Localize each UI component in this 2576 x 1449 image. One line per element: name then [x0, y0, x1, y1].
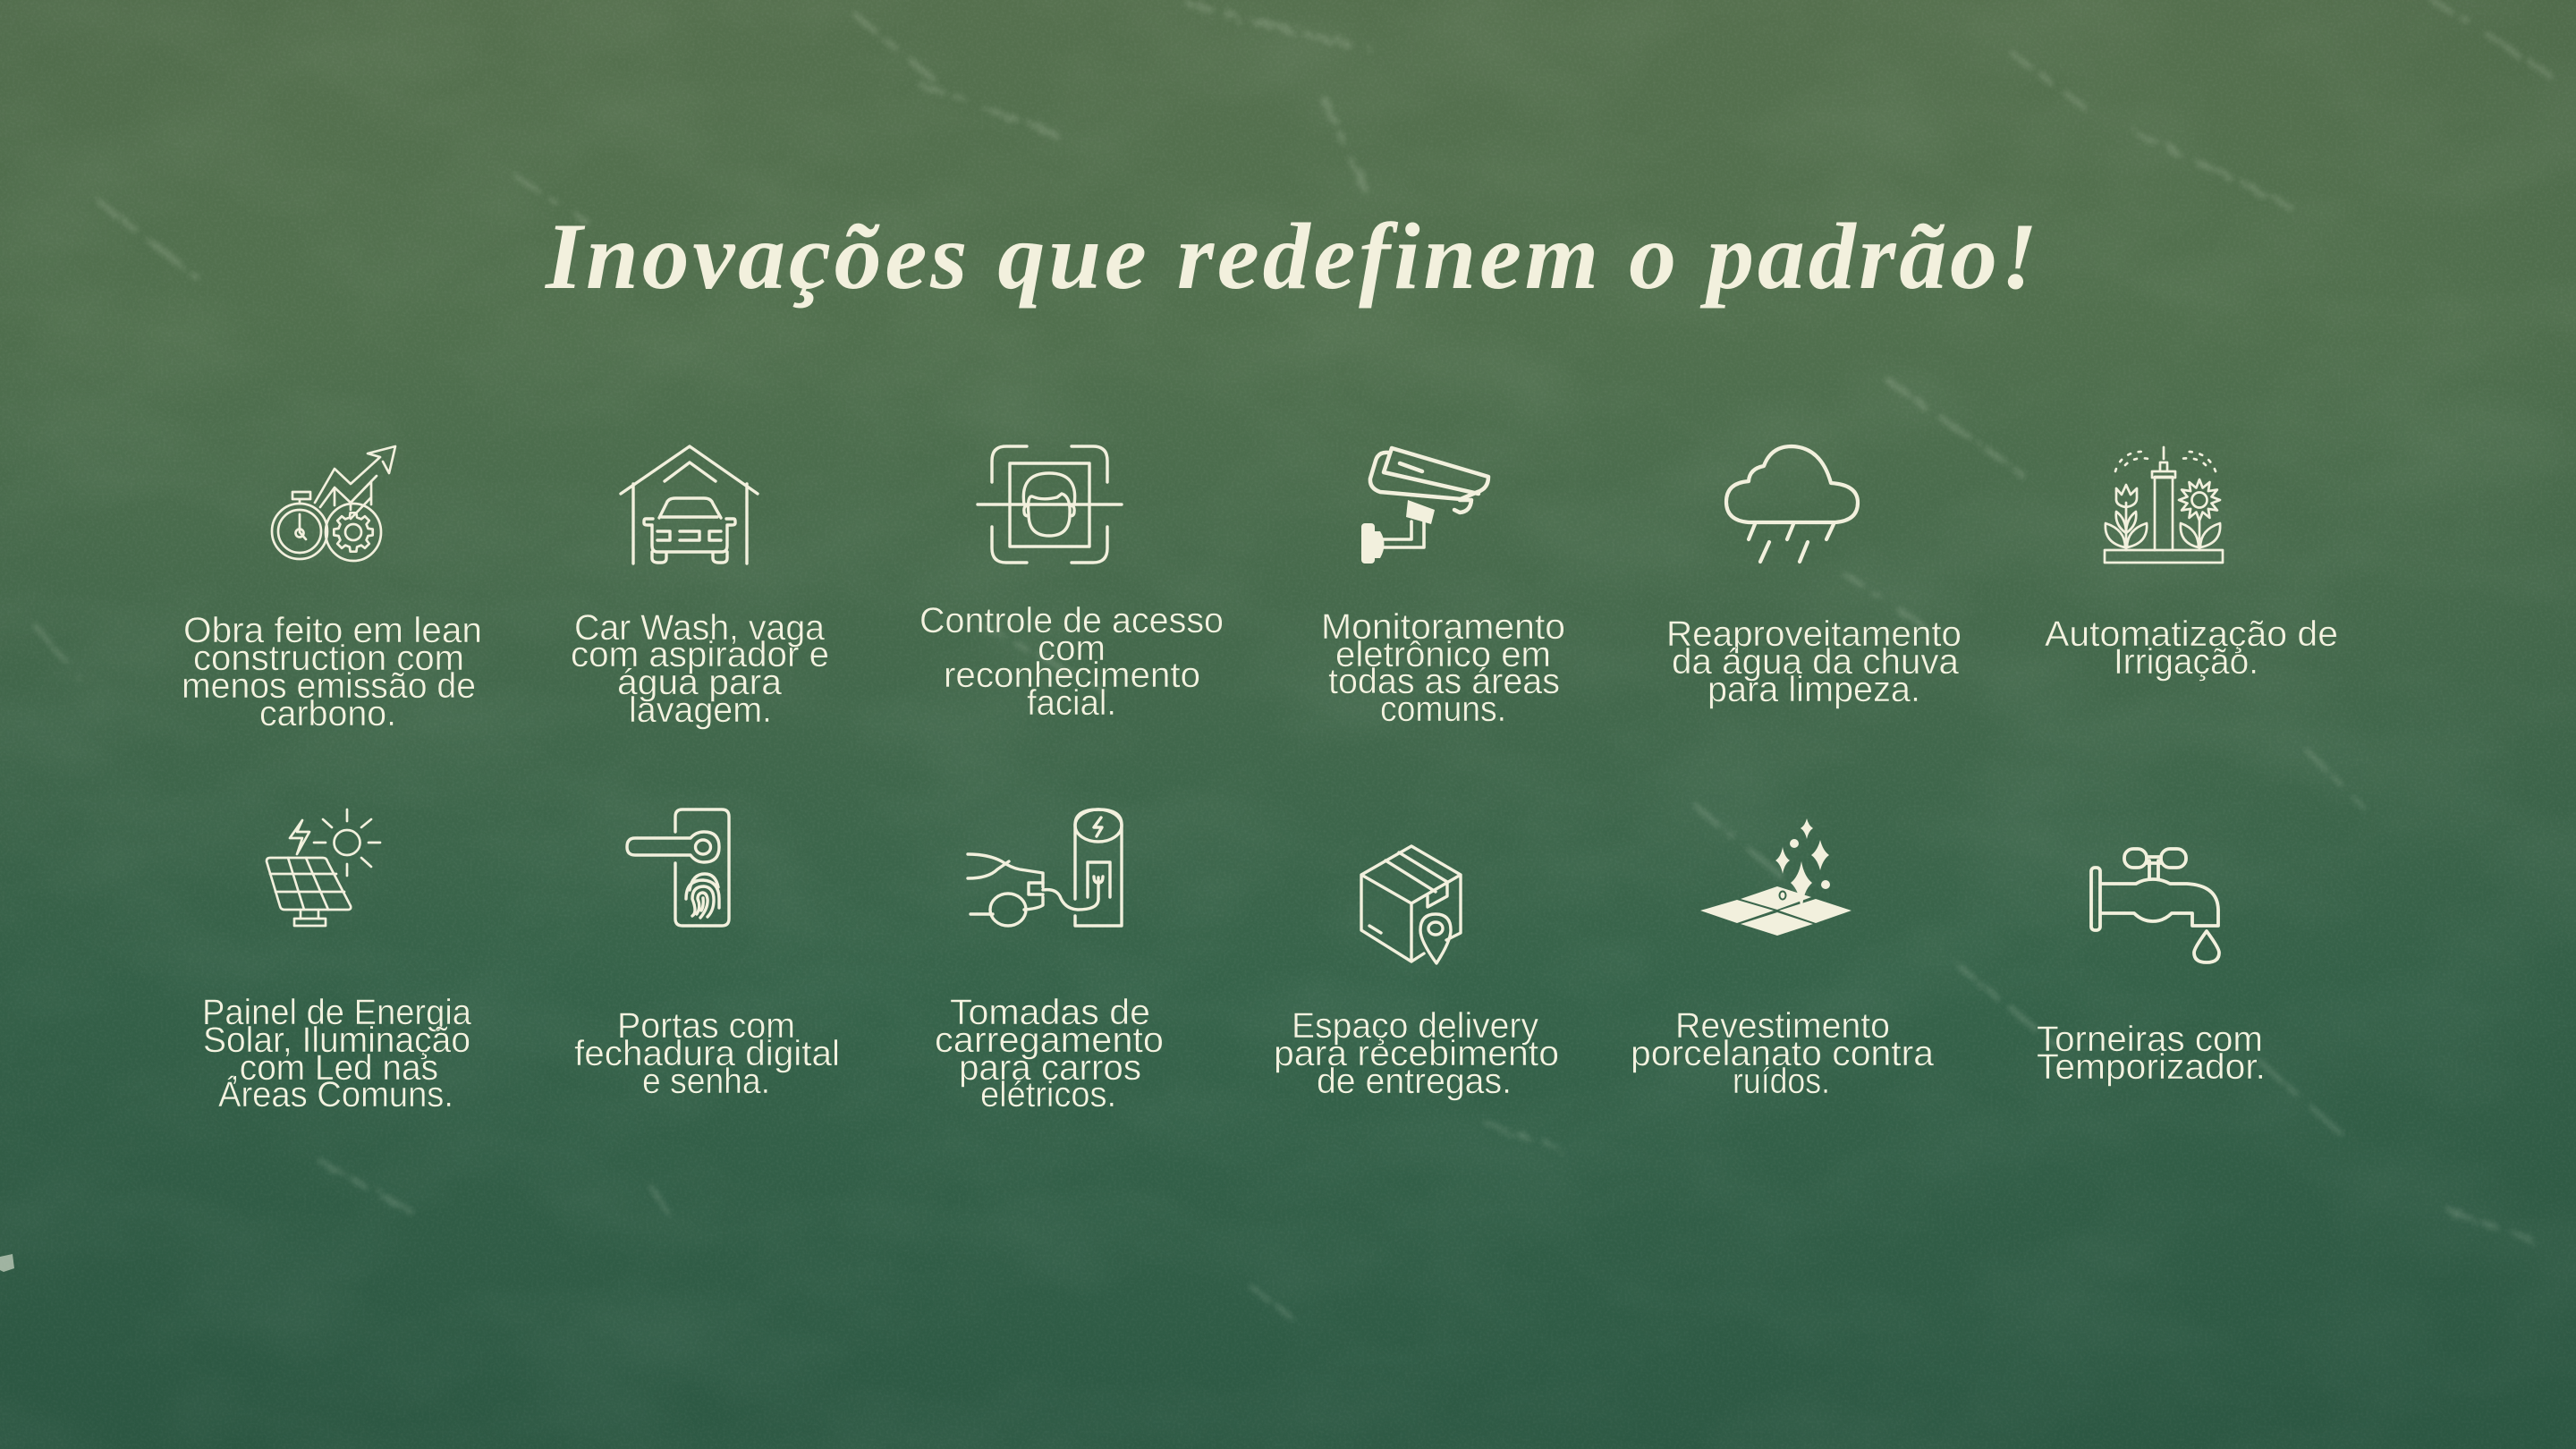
feature: irrigation automation: [2045, 447, 2338, 682]
feature: car wash: [571, 446, 829, 730]
text: rainwater reuse: da água da chuva: [1672, 642, 1960, 682]
feature: delivery space: [1274, 846, 1559, 1101]
feature: timed taps: [2037, 849, 2266, 1087]
text: electric car charging: Tomadas de: [950, 993, 1150, 1032]
text: timed taps: Temporizador.: [2037, 1047, 2266, 1087]
text: facial recognition: reconhecimento: [944, 656, 1200, 695]
text: delivery space: de entregas.: [1317, 1062, 1512, 1101]
text: rainwater reuse: [1666, 614, 1962, 709]
feature: electric car charging: [935, 809, 1164, 1114]
icon: stopwatch, gear and rising arrow: [272, 446, 395, 561]
text: solar energy: Solar, Iluminação: [203, 1021, 470, 1060]
text: timed taps: [2037, 1020, 2266, 1087]
text: electronic monitoring: eletrônico em: [1335, 635, 1551, 674]
text: rainwater reuse: Reaproveitamento: [1666, 614, 1962, 654]
text: electric car charging: elétricos.: [980, 1075, 1116, 1114]
text: porcelain tile: ruídos.: [1733, 1062, 1830, 1101]
text: electric car charging: carregamento: [935, 1021, 1164, 1060]
text: electronic monitoring: [1321, 607, 1565, 729]
icon: EV charger and car: [968, 809, 1122, 926]
text: electronic monitoring: todas as áreas: [1328, 662, 1560, 701]
text: electronic monitoring: Monitoramento: [1321, 607, 1565, 647]
text: delivery space: [1274, 1006, 1559, 1101]
text: electronic monitoring: comuns.: [1380, 690, 1506, 729]
feature: facial recognition: [919, 446, 1224, 723]
feature: lean construction: [182, 446, 482, 733]
text: solar energy: ,com Led nas: [230, 1048, 438, 1088]
feature: rainwater reuse: [1666, 446, 1962, 709]
icon: rain cloud: [1726, 446, 1858, 562]
text: timed taps: Torneiras com: [2037, 1020, 2263, 1059]
text: car wash: com aspirador e: [571, 635, 829, 674]
text: facial recognition: facial.: [1027, 683, 1116, 723]
text: car wash: água para: [617, 663, 783, 702]
icon: shining floor tiles: [1700, 818, 1852, 936]
text: car wash: [571, 608, 829, 730]
text: solar energy: [202, 993, 472, 1114]
title: Inovações que redefinem o padrão!: [544, 204, 2038, 309]
icon: parcel with location pin: [1361, 846, 1461, 963]
icon: security camera: [1361, 448, 1488, 564]
text: irrigation automation: Irrigação.: [2114, 642, 2258, 682]
text: car wash: Car Wash, vaga: [574, 608, 826, 648]
text: lean construction: carbono.: [259, 694, 396, 733]
text: digital lock: [574, 1006, 840, 1101]
text: lean construction: construction com: [193, 639, 464, 678]
text: lean construction: Obra feito em lean: [183, 611, 482, 650]
text: delivery space: para recebimento: [1274, 1034, 1559, 1073]
text: solar energy: Painel de Energia: [202, 993, 472, 1032]
text: facial recognition: com: [1038, 629, 1106, 668]
icon: solar panel and sun: [267, 809, 380, 926]
text: irrigation automation: [2045, 614, 2338, 682]
text: digital lock: fechadura digital: [574, 1034, 840, 1073]
text: irrigation automation: Automatização de: [2045, 614, 2338, 654]
text: rainwater reuse: para limpeza.: [1707, 670, 1920, 709]
text: car wash: lavagem.: [629, 691, 772, 730]
icon: car in garage: [621, 446, 758, 564]
text: facial recognition: [919, 601, 1224, 723]
feature: porcelain tile: [1631, 818, 1935, 1101]
text: solar energy: Áreas Comuns.: [218, 1074, 453, 1114]
feature: solar energy: [202, 809, 472, 1114]
text: lean construction: menos emissão de: [182, 666, 476, 706]
text: porcelain tile: Revestimento: [1675, 1006, 1890, 1046]
icon: door handle with fingerprint: [627, 809, 729, 926]
text: delivery space: Espaço delivery: [1292, 1006, 1538, 1046]
text: electric car charging: para carros: [959, 1048, 1141, 1088]
icon: sprinkler with plants: [2105, 447, 2223, 563]
text: digital lock: e senha.: [642, 1062, 770, 1101]
feature: digital lock: [574, 809, 840, 1101]
feature: electronic monitoring: [1321, 448, 1565, 729]
text: lean construction: [182, 611, 482, 733]
icon: face scan: [978, 446, 1122, 563]
text: digital lock: Portas com: [617, 1006, 795, 1046]
icon: water faucet: [2091, 849, 2219, 962]
text: electric car charging: [935, 993, 1164, 1114]
text: porcelain tile: [1631, 1006, 1935, 1101]
text: facial recognition: Controle de acesso: [919, 601, 1224, 640]
text: porcelain tile: porcelanato contra: [1631, 1034, 1935, 1073]
